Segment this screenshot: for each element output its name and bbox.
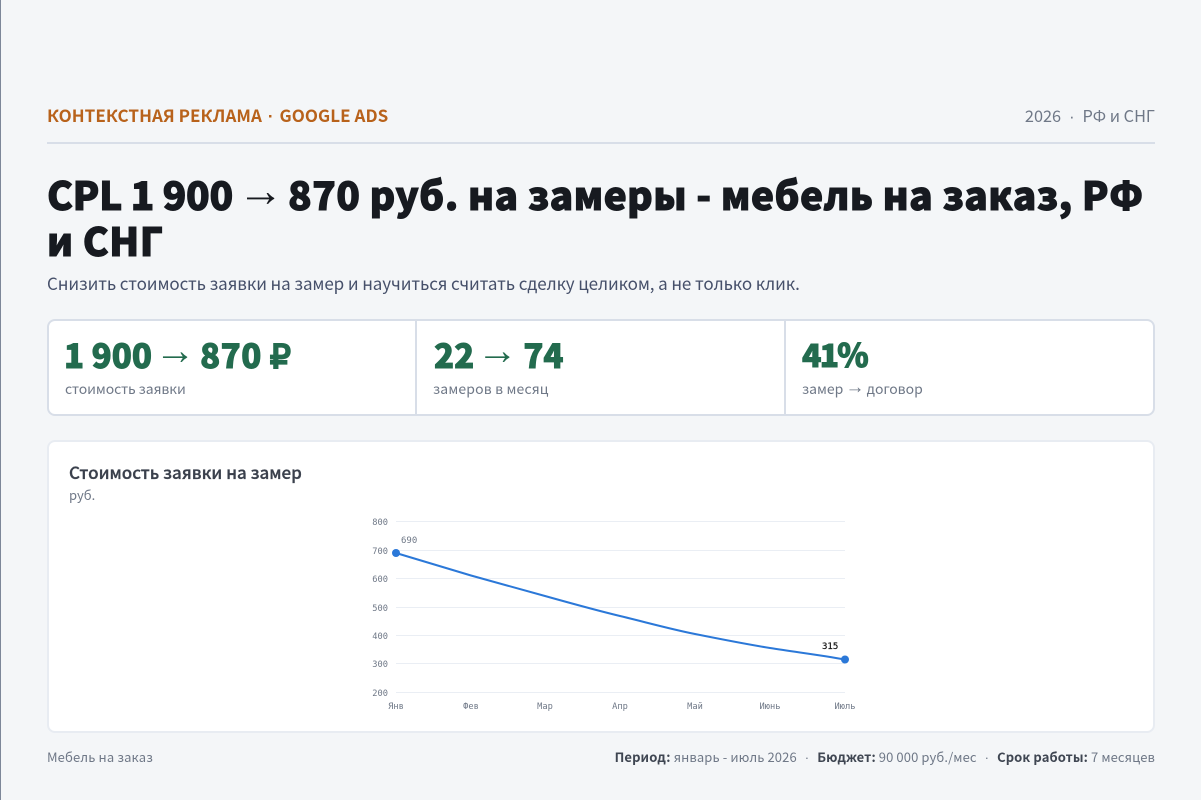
y axis labels: 600 <box>372 575 388 585</box>
x axis labels: Июнь <box>760 702 780 712</box>
panel: key metrics <box>47 319 1155 416</box>
chart unit: руб. <box>69 485 95 504</box>
x axis labels: Фев <box>463 702 479 712</box>
footer left: Мебель на заказ <box>47 747 153 766</box>
metric: cost per lead <box>49 321 417 414</box>
y axis labels: 300 <box>372 660 388 670</box>
title: CPL 1 900 → 870 руб. на замеры - мебель на заказ, РФ и СНГ <box>47 164 1144 268</box>
x axis labels: Апр <box>612 702 628 712</box>
header rule <box>47 142 1155 144</box>
metric: conversion <box>802 331 923 399</box>
metric: cost per lead: 1 900 → 870 ₽ <box>64 327 291 378</box>
footer right: Период: январь - июль 2026 · Бюджет: 90 000 руб./мес · Срок работы: 7 месяцев <box>615 747 1155 766</box>
metric: measurements per month: 22 → 74 <box>434 327 564 378</box>
year and region: 2026 · РФ и СНГ <box>1025 103 1155 127</box>
left edge line <box>0 0 1 800</box>
chart heading: Стоимость заявки на замер <box>69 459 302 484</box>
value label: 690: 690 <box>401 536 417 546</box>
y axis labels: 700 <box>372 547 388 557</box>
y axis labels: 400 <box>372 632 388 642</box>
metric: measurements per month <box>416 321 786 414</box>
x axis labels: Мар <box>537 702 553 712</box>
subtitle: Снизить стоимость заявки на замер и научиться считать сделку целиком, а не только клик. <box>47 270 800 295</box>
metric: cost per lead: стоимость заявки <box>65 379 186 399</box>
metric: measurements per month: замеров в месяц <box>433 379 549 399</box>
eyebrow label: КОНТЕКСТНАЯ РЕКЛАМА · GOOGLE ADS <box>47 102 388 127</box>
x axis labels: Июль <box>835 702 855 712</box>
y axis labels: 500 <box>372 604 388 614</box>
metric: conversion: 41% <box>802 331 867 377</box>
metric: conversion: замер → договор <box>802 377 923 399</box>
y axis labels <box>372 518 388 699</box>
y axis labels: 800 <box>372 518 388 528</box>
x axis labels <box>388 702 855 712</box>
line chart <box>372 518 855 712</box>
x axis labels: Май <box>687 702 703 712</box>
data point: July <box>841 656 849 664</box>
data line <box>396 553 845 660</box>
panel: chart card <box>47 440 1155 733</box>
y axis labels: 200 <box>372 689 388 699</box>
value label: 315: 315 <box>822 642 838 652</box>
x axis labels: Янв <box>388 702 404 712</box>
data point: January <box>392 549 400 557</box>
